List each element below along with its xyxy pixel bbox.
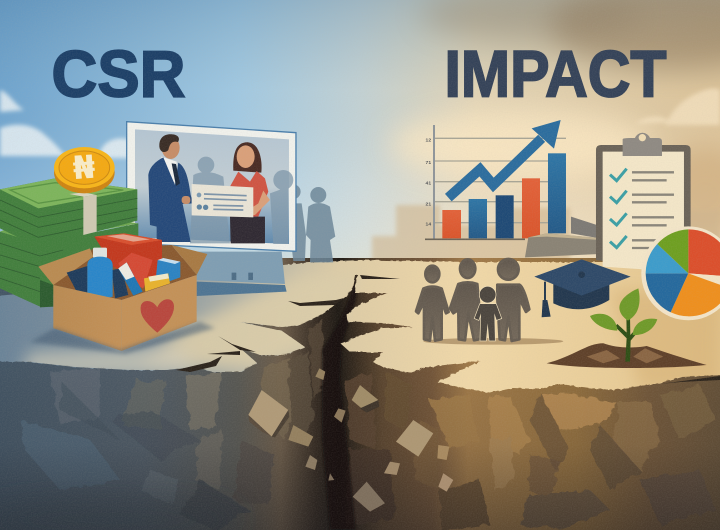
bar chart with rising arrow: 21 bbox=[426, 201, 431, 207]
stone ledge bbox=[525, 217, 600, 257]
heart on box bbox=[141, 299, 174, 333]
gold naira coin bbox=[54, 147, 115, 193]
soil mound bbox=[547, 343, 707, 368]
bar chart with rising arrow: 71 bbox=[426, 160, 431, 166]
graduation cap bbox=[534, 259, 631, 317]
distant skyline bbox=[372, 205, 720, 268]
left scene: CSR activities bbox=[0, 122, 335, 351]
lower money stack bbox=[0, 215, 138, 307]
bar chart with rising arrow: 14 bbox=[426, 221, 431, 227]
ground surface bbox=[0, 260, 720, 393]
red supply box bbox=[94, 233, 162, 287]
sky background bbox=[0, 0, 720, 300]
bar chart with rising arrow bbox=[425, 120, 566, 239]
woman in red top bbox=[229, 142, 270, 243]
cliff face with crack bbox=[0, 258, 720, 530]
title: CSR: CSR bbox=[52, 36, 186, 110]
box interior and rear flaps bbox=[53, 245, 197, 300]
lit plates beside crack bbox=[20, 270, 720, 390]
central crack darkness bbox=[322, 274, 359, 530]
thin ground cracks bbox=[176, 275, 720, 384]
title: IMPACT: IMPACT bbox=[444, 36, 666, 110]
falling rocks bbox=[248, 368, 453, 512]
family silhouettes bbox=[416, 259, 563, 345]
bar chart with rising arrow: 41 bbox=[426, 180, 431, 186]
billboard photo frame bbox=[127, 122, 296, 251]
right scene: impact measures bbox=[416, 120, 720, 368]
crowd silhouettes behind billboard bbox=[286, 184, 335, 262]
rock facets, right bbox=[415, 385, 716, 530]
billboard stand bbox=[197, 252, 287, 296]
clouds left bbox=[0, 90, 135, 158]
man in suit bbox=[148, 134, 193, 242]
rock facets, centre left bbox=[180, 318, 412, 530]
clipboard with checklist bbox=[596, 133, 693, 273]
pie chart bbox=[641, 226, 720, 320]
bar chart with rising arrow: 12 bbox=[426, 137, 431, 143]
rock facets, left bbox=[20, 368, 222, 505]
clouds right bbox=[636, 89, 720, 125]
donation box bbox=[38, 233, 207, 351]
box shadow bbox=[30, 322, 215, 354]
box front faces bbox=[53, 285, 122, 351]
blue bottle and supplies bbox=[67, 248, 180, 299]
cheque bbox=[192, 184, 253, 217]
upper money stack bbox=[0, 178, 137, 247]
gold naira coin: ₦ bbox=[71, 148, 96, 187]
seedling bbox=[590, 288, 657, 362]
